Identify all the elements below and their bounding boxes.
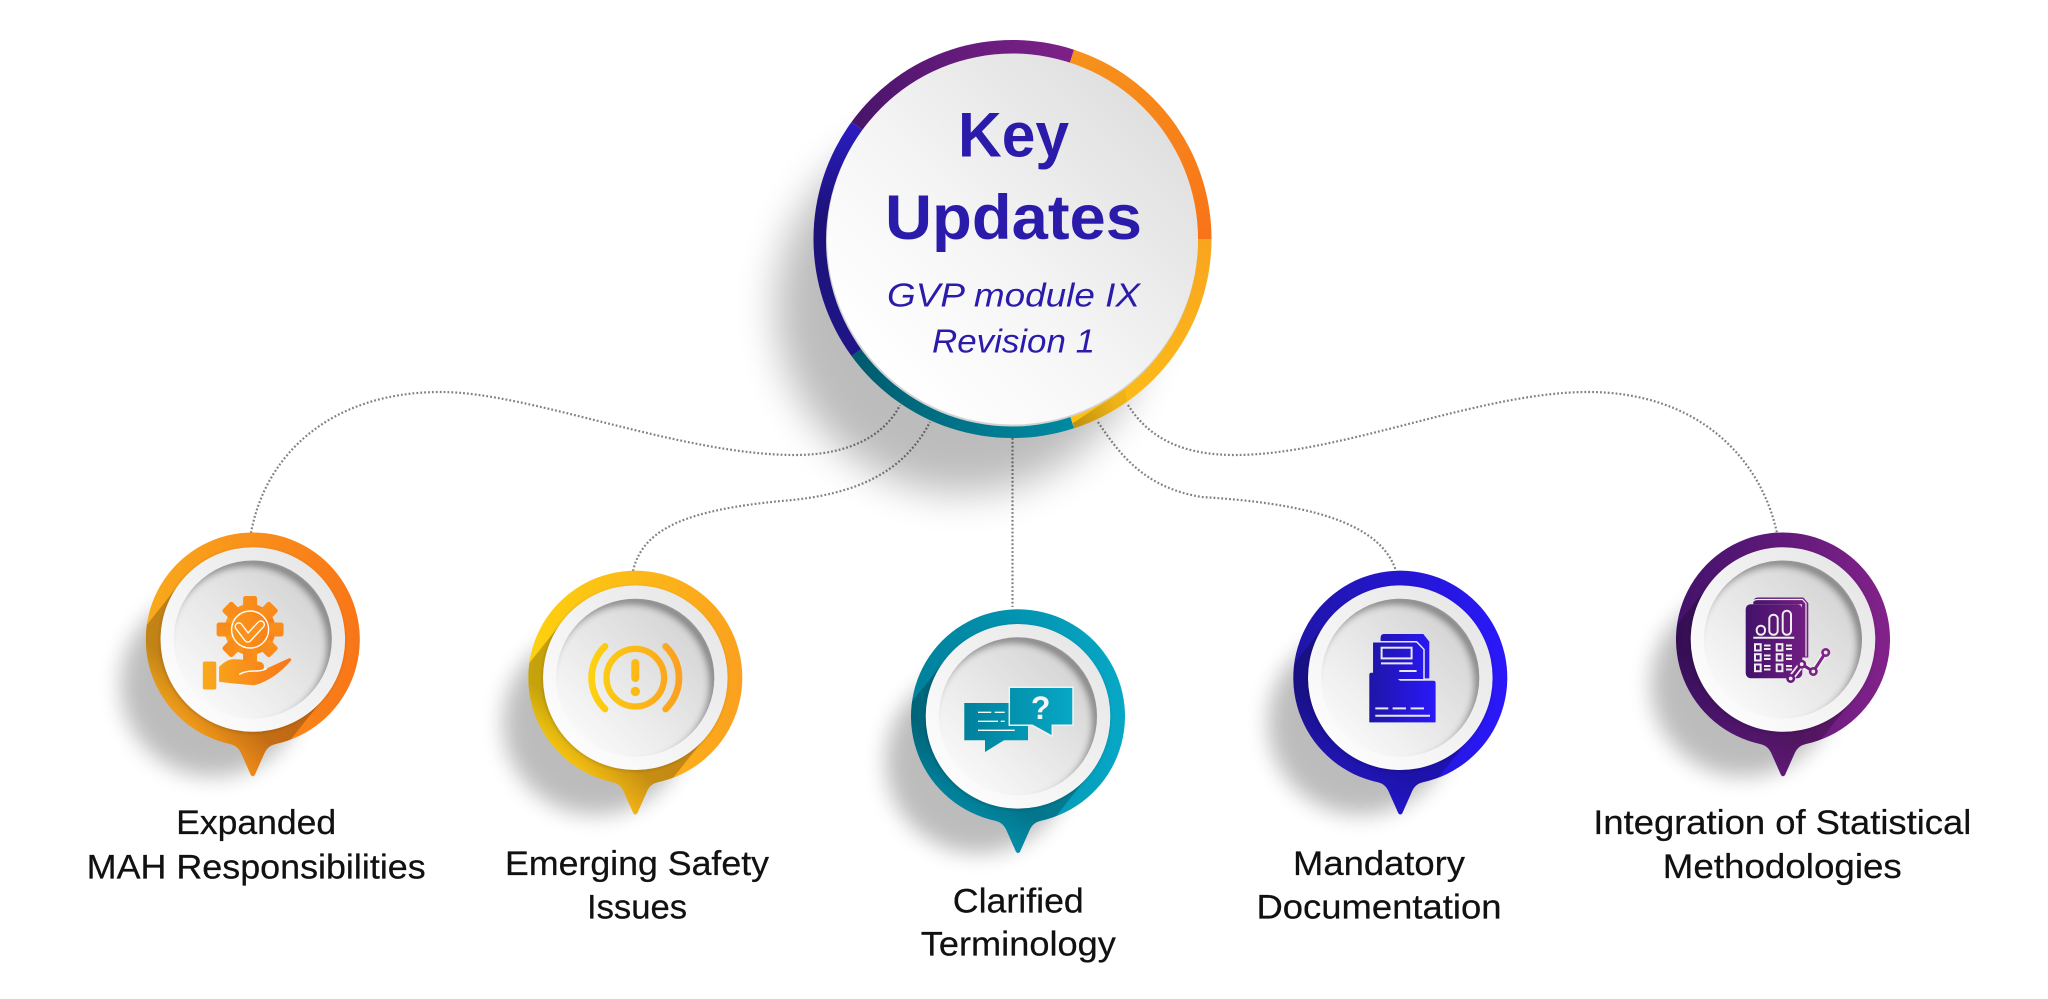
pin: Mandatory Documentation xyxy=(1268,571,1507,815)
label: Clarified Terminology: Clarified xyxy=(953,882,1084,920)
raised disc xyxy=(160,547,345,733)
icon: warning light xyxy=(592,646,679,709)
icon: speech bubbles with question mark: ? xyxy=(1031,690,1050,726)
pin shadow xyxy=(503,631,687,815)
label: Clarified Terminology: Terminology xyxy=(921,926,1117,964)
subtitle xyxy=(887,277,1142,360)
hub disc xyxy=(826,54,1198,426)
label: Expanded MAH Responsibilities: Expanded xyxy=(176,804,336,842)
pin marker xyxy=(1293,571,1507,814)
connector: hub to Expanded MAH Responsibilities xyxy=(251,392,900,533)
connector: hub to Integration of Statistical Methodologies xyxy=(1128,392,1777,533)
subtitle: GVP module IX xyxy=(887,277,1142,314)
title xyxy=(885,101,1142,253)
label: Mandatory Documentation: Mandatory xyxy=(1293,845,1466,883)
connector: hub to Emerging Safety Issues xyxy=(633,422,930,571)
icon: speech bubbles with question mark xyxy=(964,687,1073,752)
label: Expanded MAH Responsibilities: MAH Responsibilities xyxy=(87,848,426,886)
pin: Clarified Terminology xyxy=(886,609,1125,853)
icon: hand holding gear xyxy=(203,596,291,690)
raised disc xyxy=(1307,585,1493,771)
pin: Expanded MAH Responsibilities xyxy=(121,532,360,776)
pin marker xyxy=(911,609,1125,853)
pin shadow xyxy=(121,592,305,776)
label: Mandatory Documentation: Documentation xyxy=(1256,888,1502,926)
raised disc xyxy=(542,585,728,771)
pin shadow xyxy=(1651,592,1835,776)
pin shadow xyxy=(886,669,1070,853)
pin marker xyxy=(1676,532,1890,776)
pin marker xyxy=(528,571,742,814)
central hub: Key Updates xyxy=(776,40,1212,493)
label: Integration of Statistical Methodologies: Methodologies xyxy=(1663,848,1902,886)
label: Integration of Statistical Methodologies: Integration of Statistical xyxy=(1593,804,1971,842)
raised disc xyxy=(1690,547,1875,733)
icon: report with bar and line charts xyxy=(1746,598,1829,682)
label: Emerging Safety Issues: Issues xyxy=(587,888,687,926)
title: Key xyxy=(958,101,1069,171)
hub multicolour ring xyxy=(813,40,1212,440)
connector: hub to Mandatory Documentation xyxy=(1098,422,1396,571)
subtitle: Revision 1 xyxy=(932,323,1095,360)
connector: hub to Clarified Terminology xyxy=(1011,438,1014,607)
pin: Integration of Statistical Methodologies xyxy=(1651,532,1890,776)
raised disc xyxy=(925,624,1110,810)
title: Updates xyxy=(885,183,1142,253)
label: Emerging Safety Issues: Emerging Safety xyxy=(505,845,770,883)
hub cast shadow xyxy=(776,121,1148,493)
pin: Emerging Safety Issues xyxy=(503,571,742,815)
pin shadow xyxy=(1268,631,1452,815)
icon: folder with documents xyxy=(1369,634,1436,722)
pin marker xyxy=(146,532,360,776)
